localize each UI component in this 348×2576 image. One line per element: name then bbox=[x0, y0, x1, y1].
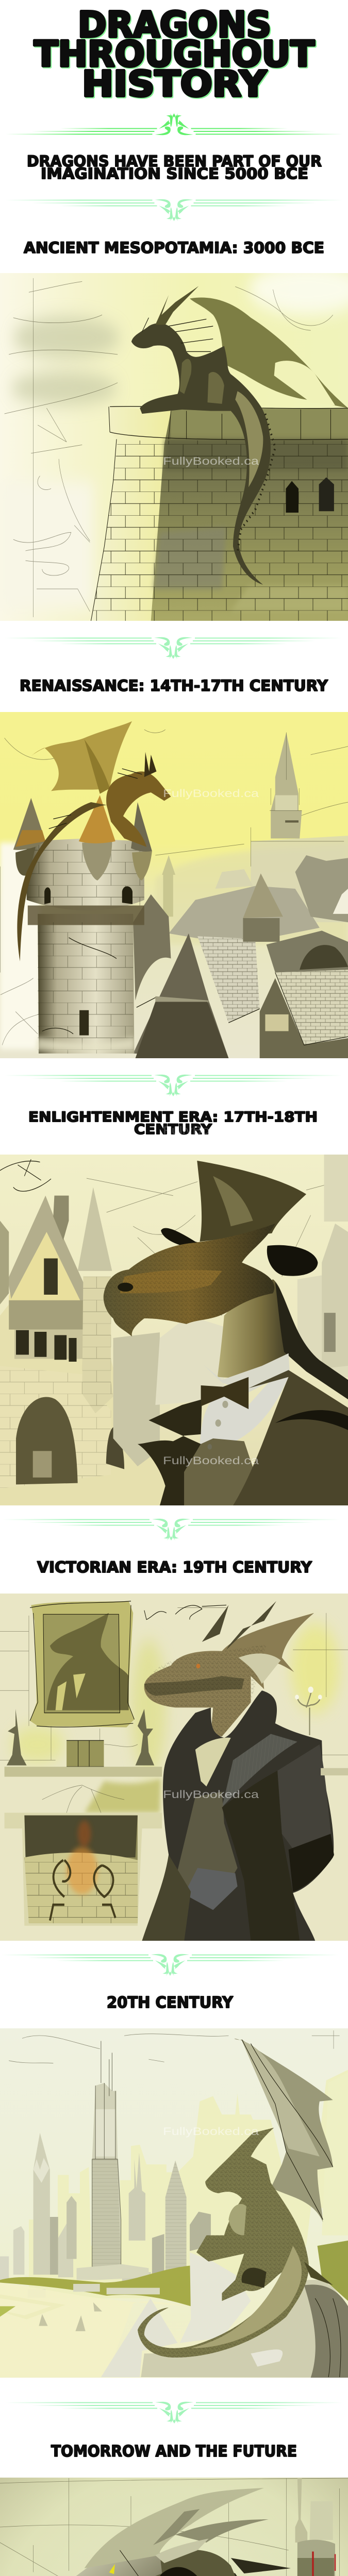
title: DRAGONS bbox=[78, 4, 271, 45]
watermark: FullyBooked.ca bbox=[163, 788, 259, 800]
heading: enlightenment era: ENLIGHTENMENT ERA: 17TH-18TH bbox=[28, 1109, 318, 1125]
heading: victorian era: VICTORIAN ERA: 19TH CENTURY bbox=[37, 1558, 312, 1576]
illustration: dragon over modern skyline bbox=[0, 2028, 348, 2378]
heading: renaissance: RENAISSANCE: 14TH-17TH CENTURY bbox=[20, 677, 328, 694]
subtitle: IMAGINATION SINCE 5000 BCE bbox=[41, 165, 308, 182]
heading: ancient mesopotamia: ANCIENT MESOPOTAMIA: 3000 BCE bbox=[24, 239, 324, 257]
illustration: dragon gentleman beside fireplace bbox=[0, 1594, 348, 1941]
subtitle bbox=[27, 152, 322, 182]
watermark: FullyBooked.ca bbox=[163, 1789, 259, 1801]
illustration: gold dragon on castle tower bbox=[0, 712, 348, 1058]
subtitle: DRAGONS HAVE BEEN PART OF OUR bbox=[27, 152, 322, 170]
title bbox=[34, 4, 314, 105]
watermark over heading: FullyBooked.ca bbox=[163, 1125, 259, 1137]
watermark: FullyBooked.ca bbox=[163, 2126, 259, 2138]
divider: ornament above victorian bbox=[3, 1519, 340, 1540]
illustration: cyborg dragon with industrial pipes bbox=[0, 2478, 348, 2576]
illustration: dragon on stone rampart bbox=[0, 264, 348, 621]
divider: ornament above renaissance bbox=[5, 637, 342, 659]
watermark: FullyBooked.ca bbox=[163, 455, 259, 467]
heading: enlightenment era bbox=[28, 1109, 318, 1138]
heading: 20th century: 20TH CENTURY bbox=[107, 1994, 234, 2012]
illustration: dragon in top hat and bow tie bbox=[0, 1155, 348, 1505]
divider: ornament above enlightenment bbox=[5, 1075, 342, 1096]
divider: ornament above first era bbox=[5, 199, 342, 221]
heading: enlightenment era: CENTURY bbox=[134, 1122, 212, 1138]
heading: tomorrow and the future: TOMORROW AND THE FUTURE bbox=[51, 2443, 297, 2461]
title: THROUGHOUT bbox=[34, 34, 314, 75]
title: HISTORY bbox=[82, 64, 267, 105]
watermark: FullyBooked.ca bbox=[163, 1455, 259, 1467]
divider: ornament above 20th century bbox=[2, 1954, 339, 1976]
divider: ornament above future bbox=[6, 2402, 343, 2424]
divider: ornament under title bbox=[5, 113, 342, 135]
